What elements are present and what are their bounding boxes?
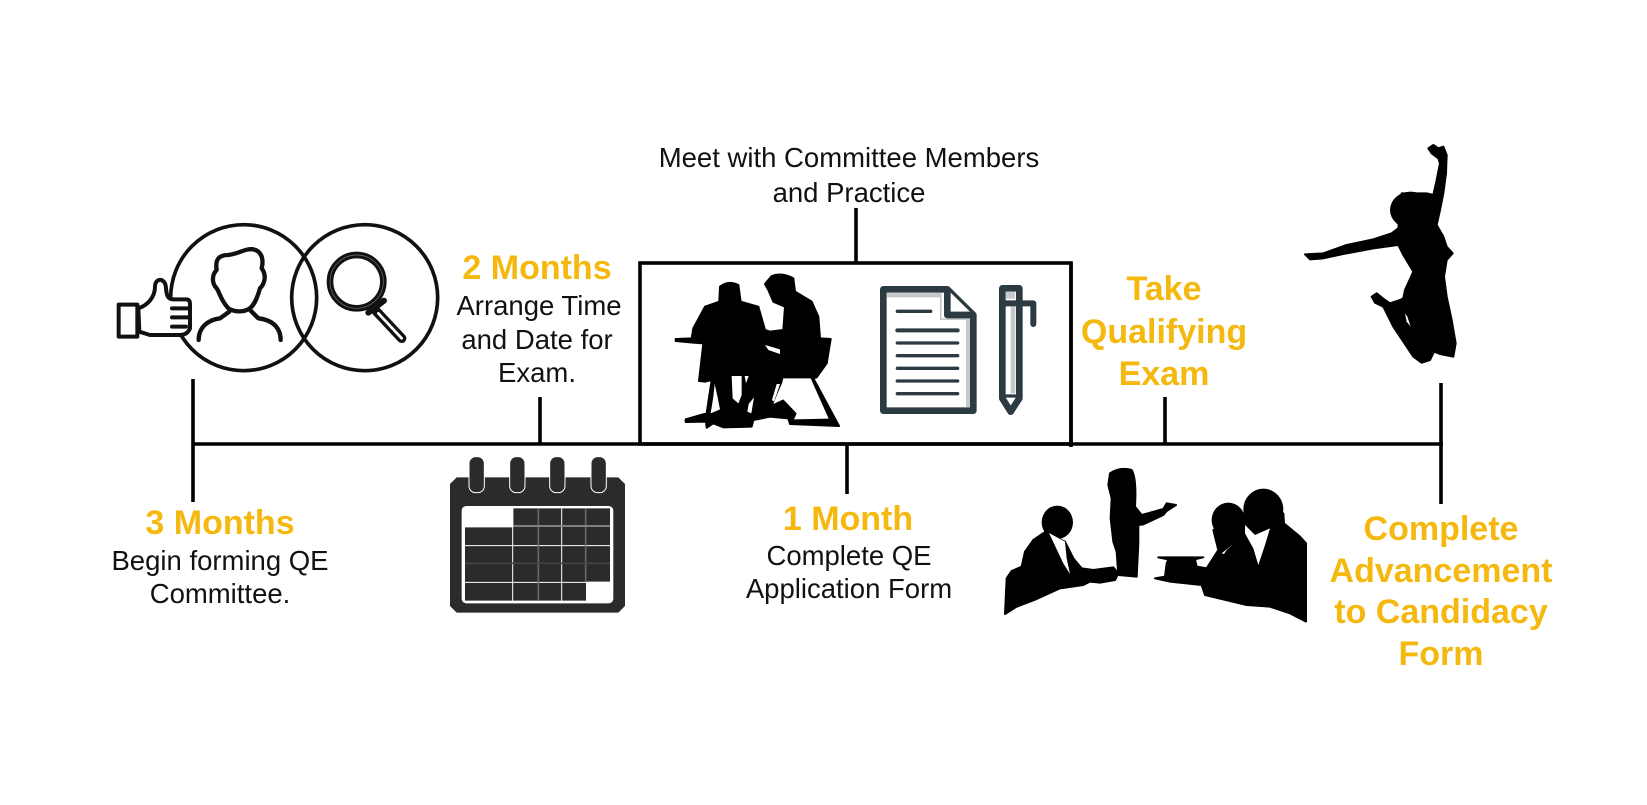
text: meet with committee members: Meet with Committee Members xyxy=(659,142,1039,173)
presenter xyxy=(1108,469,1176,577)
icon: two people meeting at a table xyxy=(676,274,839,428)
heading: take qualifying exam: Qualifying xyxy=(1081,313,1247,351)
magnifier xyxy=(330,255,402,338)
icon: pen xyxy=(1002,288,1033,412)
icon: business meeting silhouettes xyxy=(1005,469,1306,622)
icon: document xyxy=(883,289,973,411)
icon: jumping person silhouette xyxy=(1305,145,1456,363)
text: arrange time and date: and Date for xyxy=(461,324,613,355)
left circle xyxy=(171,225,317,371)
text: begin forming QE committee: Begin forming QE xyxy=(111,545,329,576)
seated man xyxy=(1005,506,1118,614)
heading: complete advancement to candidacy form: to Candidacy xyxy=(1334,593,1548,631)
thumb xyxy=(119,280,190,337)
heading: 3 months: 3 Months xyxy=(145,504,295,542)
heading: 1 month: 1 Month xyxy=(783,500,913,538)
icon: thumbs up, person and magnifier in overlapping circles xyxy=(119,225,438,371)
heading: complete advancement to candidacy form: Complete xyxy=(1364,510,1518,548)
heading: take qualifying exam: Take xyxy=(1127,270,1201,308)
text: complete QE application form: Complete QE xyxy=(766,540,932,571)
heading: 2 months: 2 Months xyxy=(462,249,612,287)
heading: complete advancement to candidacy form: Form xyxy=(1398,635,1484,673)
shirt xyxy=(1049,533,1070,574)
heading: take qualifying exam: Exam xyxy=(1119,355,1209,393)
seated pair and papers xyxy=(1155,489,1306,622)
person outline xyxy=(199,249,281,340)
panel: committee meeting and practice box xyxy=(640,263,1071,447)
right circle xyxy=(292,225,438,371)
text: complete QE application form: Application Form xyxy=(746,573,952,604)
text: arrange time and date: Exam. xyxy=(498,357,576,388)
text: arrange time and date: Arrange Time xyxy=(456,290,622,321)
timeline axis with ticks xyxy=(193,208,1443,504)
text: begin forming QE committee: Committee. xyxy=(150,578,290,609)
heading: complete advancement to candidacy form: Advancement xyxy=(1330,552,1552,590)
icon: calendar xyxy=(450,457,625,613)
text: meet with committee members: and Practice xyxy=(773,177,925,208)
